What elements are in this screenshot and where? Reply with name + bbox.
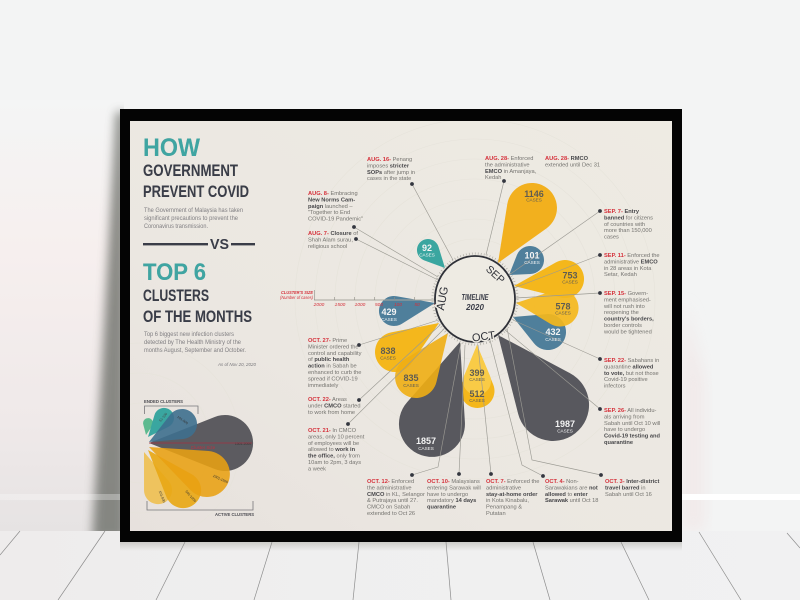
note: OCT 12: OCT. 12- Enforced xyxy=(367,479,414,485)
intro paragraph: government xyxy=(144,207,244,230)
note: OCT 3: Sabah until Oct 16 xyxy=(605,492,652,498)
value: 512: 512 xyxy=(469,389,485,399)
heading: how government prevent covid: GOVERNMENT xyxy=(143,162,238,180)
legend heading: ended clusters: ENDED CLUSTERS xyxy=(144,399,184,405)
note: OCT 12: the administrative xyxy=(367,485,412,491)
value: 1146: 1146 xyxy=(524,189,544,199)
legend petal: 501-1000: 501-1000 xyxy=(184,490,197,503)
scale axis: cluster's size: 100 xyxy=(394,302,402,308)
versus divider: VS xyxy=(210,236,229,253)
note: OCT 22: CMCO started xyxy=(324,403,360,409)
note: OCT 27: enhanced to curb the xyxy=(308,370,361,376)
note: SEP 22: Covid-19 positive xyxy=(604,377,648,383)
note: SEP 26: Sabah until Oct 10 will xyxy=(604,421,660,427)
petal: 92 cases xyxy=(412,234,453,276)
value: 1857: 1857 xyxy=(416,436,436,446)
note: OCT 3: travel barred xyxy=(605,485,640,491)
note: SEP 22: allowed xyxy=(632,364,654,370)
petal: 578 cases xyxy=(514,285,581,328)
note: AUG 28 RMCO: AUG. 28- RMCO xyxy=(545,156,588,162)
note: OCT 4: allowed xyxy=(545,492,566,498)
note: SEP 11: EMCO xyxy=(641,259,658,265)
versus divider xyxy=(143,236,255,253)
note: OCT 7: Putatan xyxy=(486,511,506,517)
note: SEP 11: Setar, Kedah xyxy=(604,272,637,278)
intro paragraph: clusters xyxy=(144,331,246,354)
note: SEP 26: SEP. 26- All individu- xyxy=(604,408,656,414)
value: 1857 xyxy=(416,436,436,451)
note: SEP 7: for citizens xyxy=(626,215,653,221)
note: OCT 21: areas, only 10 percent xyxy=(308,434,365,440)
heading: how government prevent covid: HOW xyxy=(143,134,200,162)
note: AUG 7: Shah Alam surau, xyxy=(308,237,353,243)
note: OCT 21: the office, xyxy=(308,454,335,460)
value: 432: 432 xyxy=(545,327,561,337)
value: 432 xyxy=(545,327,561,342)
note: SEP 26: quarantine xyxy=(604,440,633,446)
note: OCT 7: OCT. 7- Enforced the xyxy=(486,479,539,485)
month label: SEP: SEP xyxy=(483,263,507,286)
legend petal: 51-100: 51-100 xyxy=(158,412,168,423)
heading: how government prevent covid: PREVENT COVID xyxy=(143,183,249,201)
note: SEP 11: SEP. 11- Enforced the xyxy=(604,253,660,259)
note: OCT 10: mandatory xyxy=(427,498,455,504)
note: OCT 27: Minister ordered the xyxy=(308,344,359,350)
note: OCT 7: stay-at-home order xyxy=(486,492,538,498)
note: AUG 16: imposes xyxy=(367,163,390,169)
note: OCT 12: CMCO on Sabah xyxy=(367,505,410,511)
note: AUG 28 Amanjaya: AUG. 28- Enforced xyxy=(485,156,533,162)
note: OCT 27: OCT. 27- Prime xyxy=(308,338,347,344)
legend petal: 101-500 active: 101-500 xyxy=(158,490,166,503)
note: OCT 12: in KL, Selangor xyxy=(386,492,425,498)
note: OCT 21: allowed to xyxy=(308,447,335,453)
heading: top 6 clusters of the months xyxy=(143,259,252,326)
value: 512: CASES xyxy=(469,398,485,403)
hub title xyxy=(462,293,489,312)
frame shadow on wall xyxy=(92,112,126,540)
value: 1146: CASES xyxy=(526,198,542,202)
value: 1987 xyxy=(555,419,575,434)
petal: 432 cases xyxy=(506,300,572,356)
value: 399: CASES xyxy=(469,377,485,382)
value: 429: CASES xyxy=(381,317,397,322)
value: 101: CASES xyxy=(524,260,540,265)
legend petal: 0-50 xyxy=(141,417,154,436)
note: OCT 4: OCT. 4- Non- xyxy=(545,479,579,485)
value: 835 xyxy=(403,373,419,388)
intro paragraph: clusters: months August, September and October. xyxy=(144,347,246,354)
note: OCT 12: extended to Oct 26 xyxy=(367,511,415,517)
intro paragraph: clusters: detected by The Health Ministry of the xyxy=(144,339,242,346)
value: 835: 835 xyxy=(403,373,419,383)
value: 429: 429 xyxy=(381,307,397,317)
value: 578: 578 xyxy=(555,302,571,312)
note: AUG 16: stricter xyxy=(390,163,410,169)
note: OCT 10: have to undergo xyxy=(427,492,468,498)
scale axis: cluster's size xyxy=(280,290,437,308)
note: OCT 27: spread if COVID-19 xyxy=(308,376,358,382)
picture frame xyxy=(120,109,682,542)
note: AUG 7: religious school xyxy=(308,244,347,250)
note: AUG 8: COVID-19 Pandemic" xyxy=(308,217,363,223)
connector lines xyxy=(348,181,601,476)
value: 432: CASES xyxy=(545,337,561,342)
petal: 753 cases xyxy=(511,258,586,305)
petal: 512 cases xyxy=(460,345,495,408)
value: 399: 399 xyxy=(469,368,485,378)
pink wall tint left xyxy=(0,100,120,531)
note: OCT 27: in Sabah be xyxy=(326,364,357,370)
note: SEP 7: SEP. 7- Entry xyxy=(604,209,639,215)
note: SEP 7: more than 150,000 xyxy=(604,228,652,234)
value: 835: CASES xyxy=(403,383,419,388)
note: AUG 28 Amanjaya: Kedah xyxy=(485,175,501,181)
note: AUG 16: SOPs xyxy=(367,170,382,176)
hub title: 2020 xyxy=(465,303,484,312)
value: 838: 838 xyxy=(380,346,396,356)
note: OCT 12: & Putrajaya until 27. xyxy=(367,498,418,504)
note: OCT 21: only from xyxy=(336,454,360,460)
note: OCT 27: action xyxy=(308,364,325,370)
note: OCT 12: CMCO xyxy=(367,492,385,498)
note: OCT 10: 14 days xyxy=(455,498,476,504)
scale axis: cluster's size: (Number of cases) xyxy=(280,295,314,300)
note: OCT 21: 10am to 2pm, 3 days xyxy=(308,460,361,466)
scale axis: cluster's size: CLUSTER'S SIZE xyxy=(281,290,314,296)
note: AUG 8: AUG. 8- Embracing xyxy=(308,191,358,197)
petal value labels xyxy=(380,189,578,451)
note: AUG 8: "Together to End xyxy=(308,210,350,216)
note: OCT 21: work in xyxy=(334,447,356,453)
petal: 1987 cases xyxy=(470,313,604,456)
note: OCT 7: Penampang & xyxy=(486,505,522,511)
heading: top 6 clusters of the months: CLUSTERS xyxy=(143,287,209,305)
timeline hub xyxy=(432,254,518,345)
note: OCT 4: not xyxy=(589,485,598,491)
value: 92 xyxy=(419,243,435,258)
note: SEP 15: ment emphasised- xyxy=(604,297,651,303)
intro paragraph: government: The Government of Malaysia has taken xyxy=(144,207,244,214)
skirting highlight xyxy=(0,494,800,500)
note: SEP 15: would be tightened xyxy=(603,329,652,335)
value: 753: CASES xyxy=(562,280,578,284)
value: 429 xyxy=(381,307,397,322)
month label: OCT: OCT xyxy=(471,329,496,345)
note: AUG 16: AUG. 16- Penang xyxy=(367,157,412,163)
value: 399 xyxy=(469,368,485,382)
note: SEP 22: to vote, xyxy=(604,371,625,377)
note: OCT 22: under xyxy=(308,403,324,409)
scale axis: cluster's size: 500 xyxy=(375,302,383,308)
note: SEP 7: banned xyxy=(604,215,625,221)
heading: top 6 clusters of the months: TOP 6 xyxy=(143,259,206,286)
note: OCT 21: a week xyxy=(308,466,326,472)
note: SEP 26: Covid-19 testing and xyxy=(604,434,660,440)
legend heading: active clusters: ACTIVE CLUSTERS xyxy=(215,512,255,518)
note: OCT 7: administrative xyxy=(486,485,521,491)
petal: 399 cases xyxy=(463,345,491,395)
note: AUG 8: launched – xyxy=(325,204,353,210)
legend: cluster size key xyxy=(131,399,255,518)
value: 1987: CASES xyxy=(557,428,573,434)
note: OCT 27: immediately xyxy=(308,383,338,389)
month ticks xyxy=(432,254,518,344)
note: AUG 8: paign xyxy=(308,204,324,210)
note: OCT 4: Sarawakians are xyxy=(545,485,589,491)
legend petal: 1501-2000: 1501-2000 xyxy=(235,442,251,446)
hub title: TIMELINE xyxy=(462,293,489,302)
note: SEP 7: of countries with xyxy=(604,222,645,228)
petal: 429 cases xyxy=(376,288,438,329)
connector end dots xyxy=(346,179,603,478)
note: SEP 15: SEP. 15- Govern- xyxy=(604,291,648,297)
scale axis: cluster's size: 0 xyxy=(434,302,437,308)
note: OCT 3: in xyxy=(641,485,645,491)
value: 101 xyxy=(524,250,540,265)
value: 1987: 1987 xyxy=(555,419,575,429)
note: OCT 21: OCT. 21- In CMCO xyxy=(308,428,356,434)
month label: AUG: AUG xyxy=(435,286,451,311)
note: OCT 4: Sarawak xyxy=(545,498,569,504)
value: 838 xyxy=(380,346,396,360)
note: OCT 4: to enter xyxy=(567,492,588,498)
scale axis: cluster's size: 1000 xyxy=(355,302,366,308)
value: 101: 101 xyxy=(524,250,540,260)
value: 753: 753 xyxy=(562,270,578,280)
legend petal: 101-500 ended: 101-500 xyxy=(176,415,189,425)
note: AUG 16: cases in the state xyxy=(367,176,411,182)
value: 1857: CASES xyxy=(418,446,434,451)
note: SEP 26: have to undergo xyxy=(604,427,645,433)
note: OCT 27: control and capability xyxy=(308,351,362,357)
note: SEP 11: administrative xyxy=(604,259,641,265)
note: AUG 8: New Norms Cam- xyxy=(308,197,355,203)
note: OCT 4: until Oct 18 xyxy=(570,498,598,504)
note: OCT 22: OCT. 22- Areas xyxy=(308,397,347,403)
value: 838: CASES xyxy=(380,356,396,360)
floor xyxy=(0,531,800,600)
scale axis: cluster's size: 50 xyxy=(414,302,420,308)
tint right of frame xyxy=(684,300,703,531)
note: SEP 15: country's borders, xyxy=(604,317,654,323)
note: AUG 7: AUG. 7- Closure of xyxy=(308,231,358,237)
note: AUG 28 RMCO: extended until Dec 31 xyxy=(545,162,600,168)
intro paragraph: government: significant precautions to prevent the xyxy=(144,215,239,222)
note: OCT 22: to work from home xyxy=(308,410,355,416)
heading: how government prevent covid xyxy=(143,134,249,201)
note: OCT 27: of xyxy=(308,357,314,363)
note: SEP 22: quarantine xyxy=(604,364,632,370)
poster paper xyxy=(130,121,672,531)
note: SEP 15: will not rush into xyxy=(603,304,645,310)
note: OCT 3: OCT. 3- Inter-district xyxy=(605,479,659,485)
petal: 101 cases xyxy=(501,240,550,286)
petal: 835 cases xyxy=(387,321,465,406)
concentric guide rings xyxy=(384,121,655,346)
note: SEP 22: SEP. 22- Sabahans in xyxy=(604,358,659,364)
date note: As of Nov 20, 2020 xyxy=(217,362,256,368)
note: OCT 27: public health xyxy=(314,357,350,363)
legend petal: 1001-1500: 1001-1500 xyxy=(212,474,229,484)
note: OCT 10: quarantine xyxy=(427,505,456,511)
petal: 1146 cases xyxy=(477,174,566,276)
note: AUG 16: after jump in xyxy=(384,170,415,176)
value: 92: 92 xyxy=(422,243,432,253)
value: 578: CASES xyxy=(555,310,571,316)
note: SEP 7: cases xyxy=(604,235,619,241)
note: SEP 15: border controls xyxy=(604,323,642,329)
intro paragraph: government: Coronavirus transmission. xyxy=(144,223,208,230)
cluster size axis line: Cluster Size xyxy=(191,445,216,450)
intro paragraph: clusters: Top 6 biggest new infection clusters xyxy=(144,331,234,338)
note: SEP 22: infectors xyxy=(604,384,626,390)
value: 512 xyxy=(469,389,485,403)
heading: top 6 clusters of the months: OF THE MONTHS xyxy=(143,308,252,326)
note: AUG 28 Amanjaya: in Amanjaya, xyxy=(504,169,536,175)
note: OCT 7: in Kota Kinabalu, xyxy=(486,498,529,504)
value: 753 xyxy=(562,270,578,284)
petals xyxy=(367,174,604,466)
scale axis: cluster's size: 2000 xyxy=(313,302,325,308)
scale axis: cluster's size: 1500 xyxy=(335,302,346,308)
note: AUG 28 Amanjaya: EMCO xyxy=(485,169,503,175)
petal: 1857 cases xyxy=(390,331,491,466)
note: SEP 26: als arriving from xyxy=(604,414,645,420)
value: 92: CASES xyxy=(419,252,435,258)
note: SEP 22: but not those xyxy=(626,371,659,377)
note: OCT 10: OCT. 10- Malaysians xyxy=(427,479,480,485)
note: SEP 11: in 28 areas in Kota xyxy=(604,266,652,272)
note: AUG 28 Amanjaya: the administrative xyxy=(485,162,530,168)
note: OCT 10: entering Sarawak will xyxy=(427,485,481,491)
note: OCT 21: of employees will be xyxy=(308,441,359,447)
petal: 838 cases xyxy=(367,306,450,380)
note: SEP 15: reopening the xyxy=(604,310,639,316)
value: 578 xyxy=(555,302,571,316)
